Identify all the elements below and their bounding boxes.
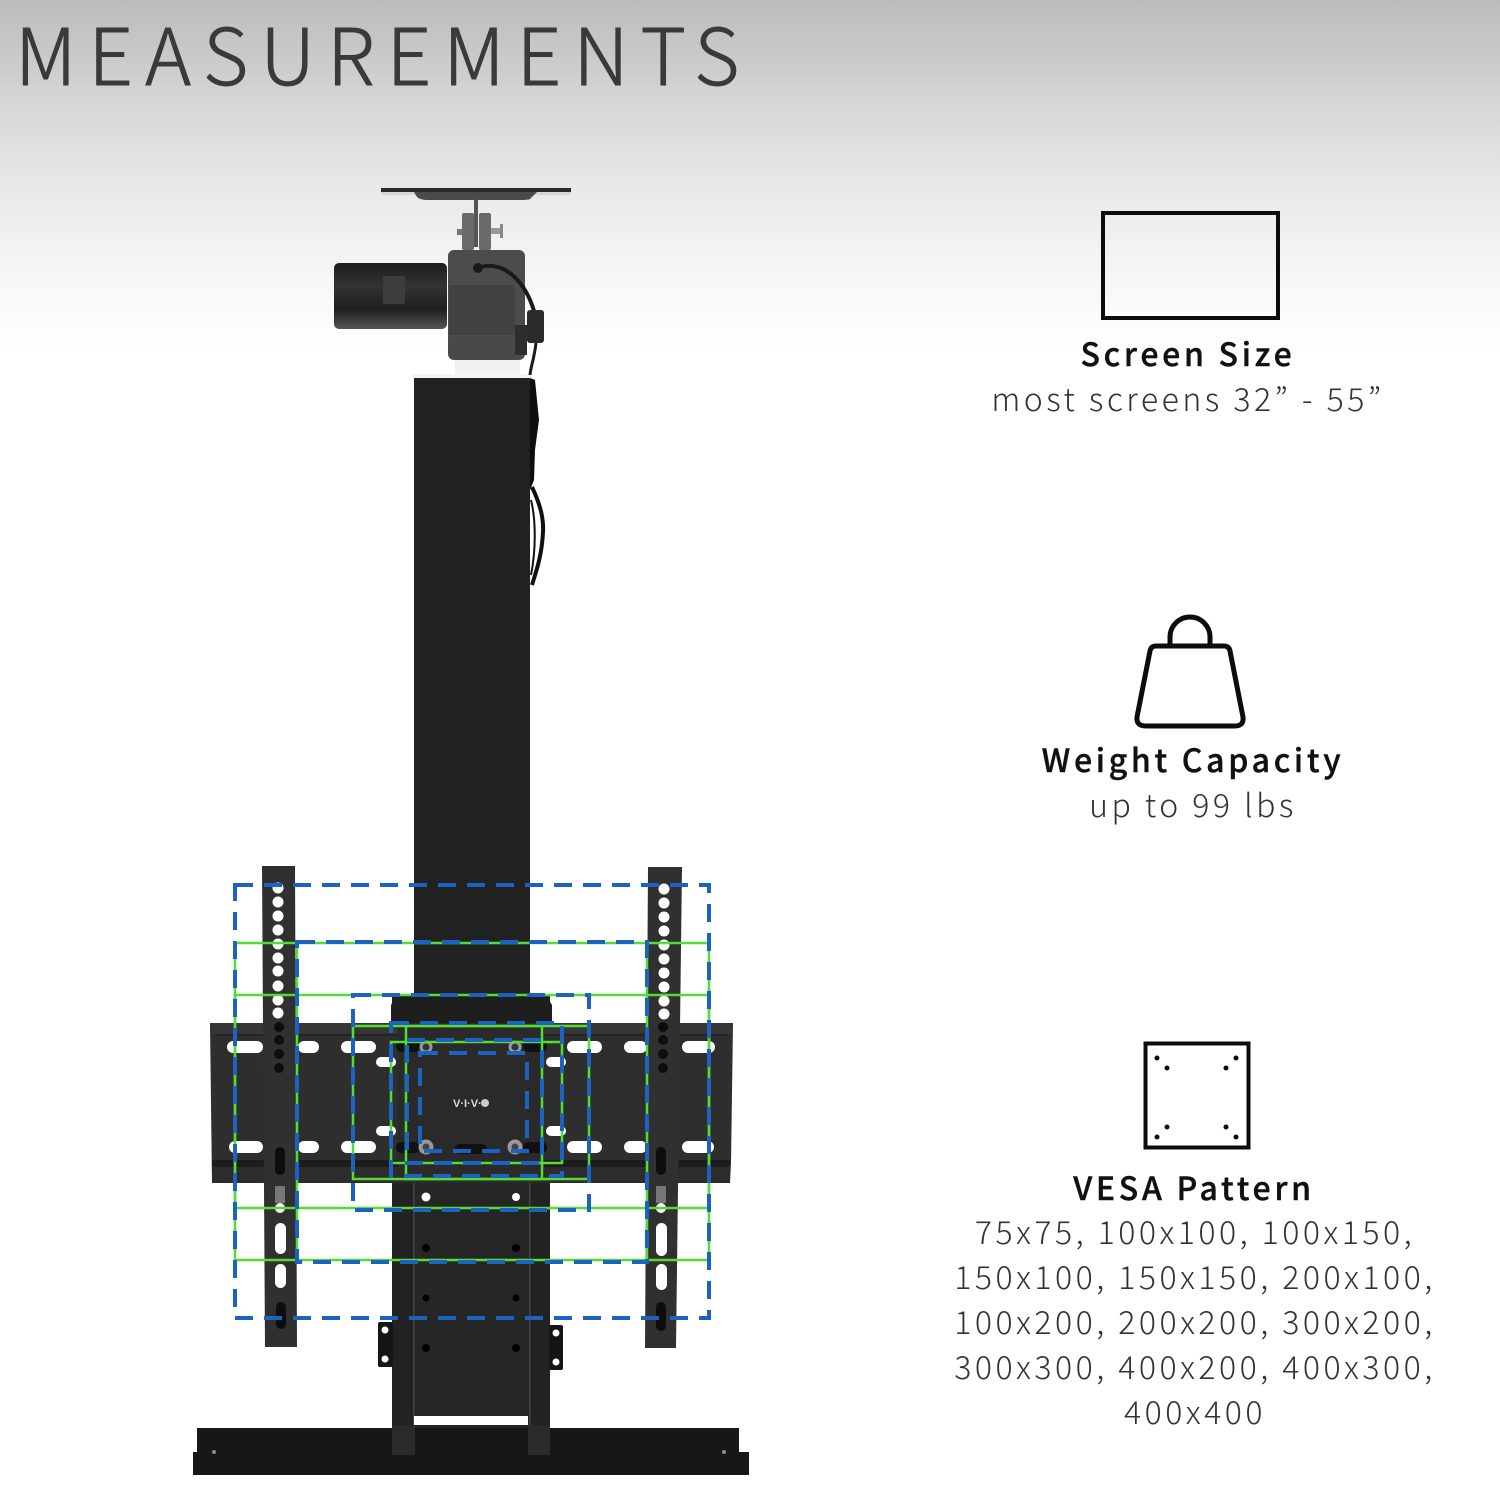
- left vertical bracket: [262, 866, 297, 1347]
- right vertical bracket: [645, 867, 682, 1348]
- centre plate with logo: V·I·V·: [453, 1098, 482, 1110]
- text: VESA sizes: 150x100, 150x150, 200x100,: [954, 1253, 1436, 1299]
- lower carriage: [392, 995, 550, 1455]
- text: VESA sizes: 75x75, 100x100, 100x150,: [975, 1208, 1415, 1254]
- base bar: [193, 1425, 749, 1475]
- panel: weight capacity: [1042, 614, 1344, 827]
- text: weight limit: up to 99 lbs: [1089, 781, 1297, 827]
- panel: VESA pattern: [954, 1042, 1436, 1434]
- centre plate with logo: [391, 995, 552, 1178]
- text: VESA sizes: 300x300, 400x200, 400x300,: [954, 1343, 1436, 1389]
- text: VESA sizes: 100x200, 200x200, 300x200,: [954, 1298, 1436, 1344]
- column: [414, 378, 543, 1028]
- icon: screen rectangle: [1101, 211, 1280, 320]
- heading: weight capacity: Weight Capacity: [1042, 736, 1344, 782]
- TV wall plate: [210, 1023, 733, 1183]
- text: VESA sizes: [954, 1208, 1436, 1434]
- text: screen range: most screens 32” - 55”: [991, 375, 1385, 421]
- green VESA outlines: [235, 943, 709, 1260]
- motor assembly: [334, 188, 571, 378]
- panel: screen size: [991, 211, 1385, 421]
- heading: VESA pattern: VESA Pattern: [1073, 1164, 1315, 1210]
- blue VESA dashed outlines: [235, 885, 709, 1318]
- heading: screen size: Screen Size: [1081, 330, 1295, 376]
- text: VESA sizes: 400x400: [1124, 1388, 1266, 1434]
- icon: VESA holes: [1144, 1042, 1250, 1150]
- side tabs: [378, 1322, 563, 1370]
- icon: weight: [1134, 614, 1246, 728]
